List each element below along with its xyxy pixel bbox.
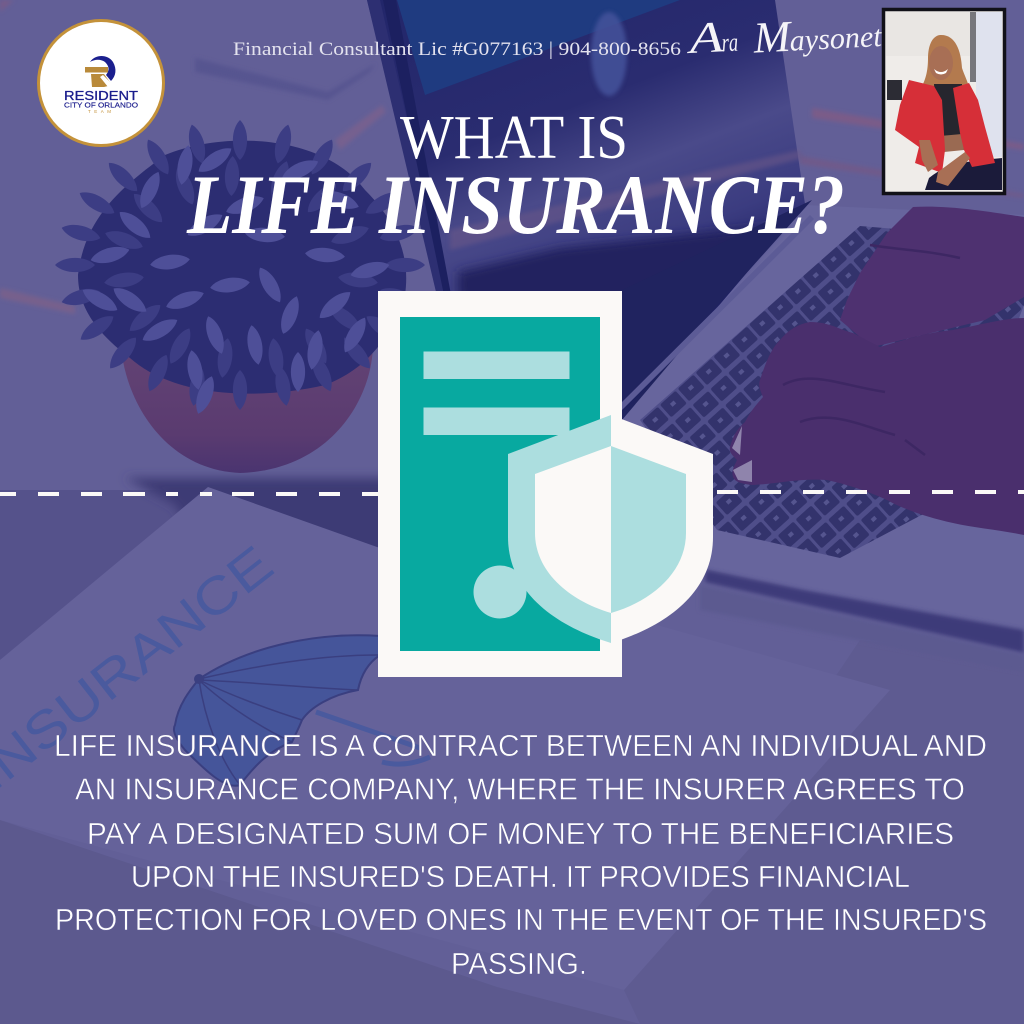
- title: [186, 104, 845, 252]
- laptop screen: [367, 0, 805, 420]
- logo city: CITY OF ORLANDO: [64, 102, 139, 110]
- dashed divider: [0, 490, 1024, 496]
- body text: PASSING.: [451, 946, 587, 981]
- icon: policy document with shield: [378, 291, 713, 677]
- portrait photo: [884, 10, 1004, 194]
- body text: [54, 728, 987, 981]
- umbrella illustration: [174, 635, 430, 786]
- signature: M: [751, 12, 794, 63]
- logo name: RESIDENT: [64, 89, 138, 103]
- laptop base: [620, 205, 1024, 632]
- shaded desk below left: [0, 490, 260, 660]
- body text: AN INSURANCE COMPANY, WHERE THE INSURER AGREES TO: [75, 772, 965, 806]
- desk streaks: [0, 0, 1024, 314]
- title line: what is: WHAT IS: [400, 104, 628, 172]
- body text: PAY A DESIGNATED SUM OF MONEY TO THE BENEFICIARIES: [87, 816, 954, 851]
- signature: aysonet: [789, 20, 883, 58]
- logo team: TEAM: [88, 109, 111, 114]
- signature: A: [684, 12, 726, 63]
- body text: UPON THE INSURED'S DEATH. IT PROVIDES FINANCIAL: [131, 859, 910, 894]
- logo mark: [85, 56, 115, 87]
- document face: [400, 317, 600, 651]
- insurance paper: [0, 487, 1024, 1024]
- shield: [508, 415, 713, 643]
- logo badge: Resident City of Orlando Team: [38, 20, 164, 146]
- potted plant: [55, 120, 425, 473]
- consultant license and phone: Financial Consultant Lic #G077163 | 904-800-8656: [233, 40, 681, 60]
- document sheet: [378, 291, 622, 677]
- plant shadow: [125, 478, 400, 565]
- document seal: [474, 566, 526, 618]
- keyboard: [640, 226, 1024, 558]
- title line: life insurance: LIFE INSURANCE?: [186, 158, 845, 252]
- body text: LIFE INSURANCE IS A CONTRACT BETWEEN AN INDIVIDUAL AND: [54, 728, 987, 763]
- typing hands: [730, 207, 1024, 535]
- signature: ra: [721, 27, 743, 57]
- document lines: [424, 352, 570, 435]
